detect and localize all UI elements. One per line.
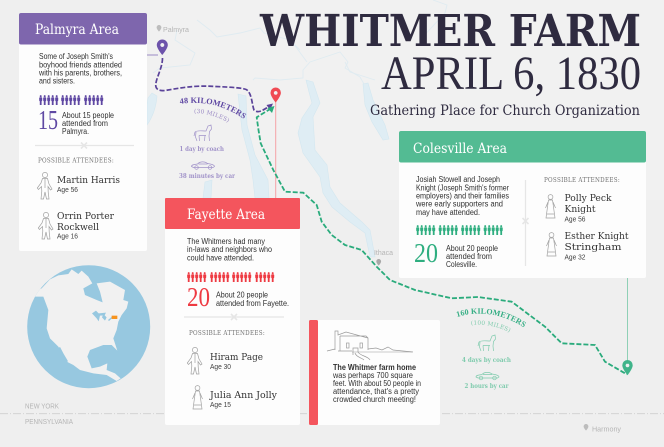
callout text: attendance, that's a pretty: [333, 387, 419, 396]
description: employers) and their families: [416, 192, 509, 200]
statistic: 15: About 15 people: [62, 111, 114, 120]
people pictogram: 20: [187, 272, 274, 282]
panel header: [399, 131, 646, 162]
location: Harmony: Harmony: [592, 426, 622, 434]
location: Ithaca: [374, 250, 393, 266]
statistic: 20: attended from Fayette.: [216, 299, 289, 308]
location: Palmyra: [157, 25, 189, 34]
panel: Colesville Area: [399, 131, 646, 278]
route: Palmyra to Whitmer Farm: [156, 58, 273, 112]
attendee: Orrin Porter Rockwell: [38, 211, 114, 240]
description: Knight (Joseph Smith's former: [416, 184, 509, 192]
route label: 48 kilometers: 48 KILOMETERS: [180, 98, 246, 118]
state border with labels: NEW YORK: [25, 404, 59, 410]
icon: car, purple: [192, 162, 214, 169]
connector lines from cards to pins: [147, 55, 628, 364]
people pictogram: 20: [416, 225, 503, 235]
attendee: Polly Peck Knight: Polly Peck: [564, 193, 612, 204]
panel: Palmyra Area: [19, 13, 147, 251]
location: Harmony: [584, 424, 622, 434]
text: 1 day by coach: 1 day by coach: [180, 146, 224, 153]
statistic: 20: Colesville.: [446, 260, 477, 269]
text: 38 minutes by car: 38 minutes by car: [179, 173, 236, 180]
subtitle: Gathering Place for Church Organization: [370, 103, 640, 119]
pin: Whitmer Farm: [270, 88, 281, 102]
statistic: 20: attended from: [446, 252, 492, 261]
attendee: Esther Knight Stringham: Stringham: [564, 242, 622, 253]
description: The Whitmers had many: [187, 237, 265, 246]
attendee: Esther Knight Stringham: Age 32: [564, 252, 586, 262]
attendee: Polly Peck Knight: Knight: [564, 204, 596, 215]
attendee: Martin Harris: [37, 172, 120, 199]
attendee: Orrin Porter Rockwell: Rockwell: [57, 222, 99, 233]
panel header: Colesville Area: [413, 141, 507, 157]
statistic: 20: 20: [414, 238, 438, 268]
callout: farm home: [309, 320, 440, 425]
attendee: Hiram Page: Hiram Page: [210, 352, 263, 363]
text: 4 days by coach: 4 days by coach: [462, 357, 511, 364]
description: could have attended.: [187, 254, 254, 262]
text: 2 hours by car: 2 hours by car: [464, 383, 509, 390]
attendee: Polly Peck Knight: Age 56: [564, 214, 586, 224]
callout text: feet. With about 50 people in: [333, 379, 421, 388]
attendee: Hiram Page: Age 30: [210, 362, 231, 371]
panel header: Fayette Area: [187, 207, 265, 223]
route label: 160 kilometers: (100 MILES): [471, 320, 510, 332]
statistic: 20: [187, 282, 289, 312]
description: in-laws and neighbors who: [187, 245, 272, 254]
attendee: Julia Ann Jolly: [192, 386, 278, 409]
callout text: [332, 363, 421, 404]
attendees heading: POSSIBLE ATTENDEES:: [189, 330, 265, 337]
pin: Harmony start: [622, 360, 633, 375]
icon: car, green: [476, 372, 499, 380]
description: Some of Joseph Smith's: [39, 52, 113, 61]
callout text: crowded church meeting!: [333, 395, 416, 404]
statistic: 15: attended from: [62, 119, 108, 128]
attendee: Polly Peck Knight: [546, 193, 612, 224]
attendee: Orrin Porter Rockwell: Orrin Porter: [57, 211, 114, 222]
panel header: Palmyra Area: [35, 22, 119, 38]
attendee: Martin Harris: Age 56: [57, 185, 78, 194]
description: and sisters.: [39, 76, 75, 86]
description: boyhood friends attended: [39, 60, 122, 69]
route: Harmony to Whitmer Farm: [257, 106, 627, 374]
route label: 48 kilometers: (30 MILES): [194, 108, 229, 122]
panel header: [19, 13, 147, 44]
description: [38, 52, 122, 86]
statistic: 15: [38, 105, 114, 136]
state border with labels: [0, 404, 664, 426]
attendee: Julia Ann Jolly: Age 15: [210, 400, 231, 409]
icon: horse, purple: [194, 125, 212, 141]
attendee: Orrin Porter Rockwell: Age 16: [57, 232, 78, 240]
statistic: 20: About 20 people: [446, 244, 498, 253]
statistic: 15: 15: [38, 105, 58, 135]
description: [187, 237, 272, 262]
callout text: The Whitmer farm home: [333, 363, 416, 372]
route label: 160 kilometers: 160 KILOMETERS: [456, 308, 526, 327]
description: were early supporters and: [415, 200, 503, 208]
description: [415, 175, 509, 217]
statistic: 20: 20: [187, 282, 210, 312]
attendee: Martin Harris: Martin Harris: [57, 175, 120, 186]
title block: [259, 6, 641, 119]
panel: Fayette Area: [165, 198, 300, 425]
attendee: Hiram Page: [187, 347, 263, 374]
attendee: Esther Knight Stringham: Esther Knight: [564, 231, 629, 242]
statistic: 15: Palmyra.: [62, 127, 89, 136]
statistic: 20: About 20 people: [216, 290, 268, 300]
pin: Palmyra start: [157, 40, 168, 55]
icon: horse, green: [478, 335, 496, 351]
globe: North America locator: [20, 265, 150, 388]
description: with his parents, brothers,: [38, 68, 122, 78]
icon: farmhouse: [327, 331, 413, 360]
attendee: Julia Ann Jolly: Julia Ann Jolly: [209, 390, 278, 401]
location: Ithaca: Ithaca: [374, 250, 393, 257]
people pictogram: 15: [39, 95, 103, 105]
statistic: 20: [414, 238, 498, 269]
state border with labels: PENNSYLVANIA: [25, 419, 73, 426]
location: Palmyra: Palmyra: [163, 27, 189, 34]
description: may have attended.: [416, 208, 480, 217]
attendee: Esther Knight Stringham: [546, 231, 629, 262]
attendees heading: POSSIBLE ATTENDEES:: [544, 177, 620, 184]
description: Josiah Stowell and Joseph: [416, 175, 500, 184]
attendees heading: POSSIBLE ATTENDEES:: [38, 158, 114, 164]
callout text: was perhaps 700 square: [332, 371, 413, 380]
panel header: [165, 198, 300, 229]
